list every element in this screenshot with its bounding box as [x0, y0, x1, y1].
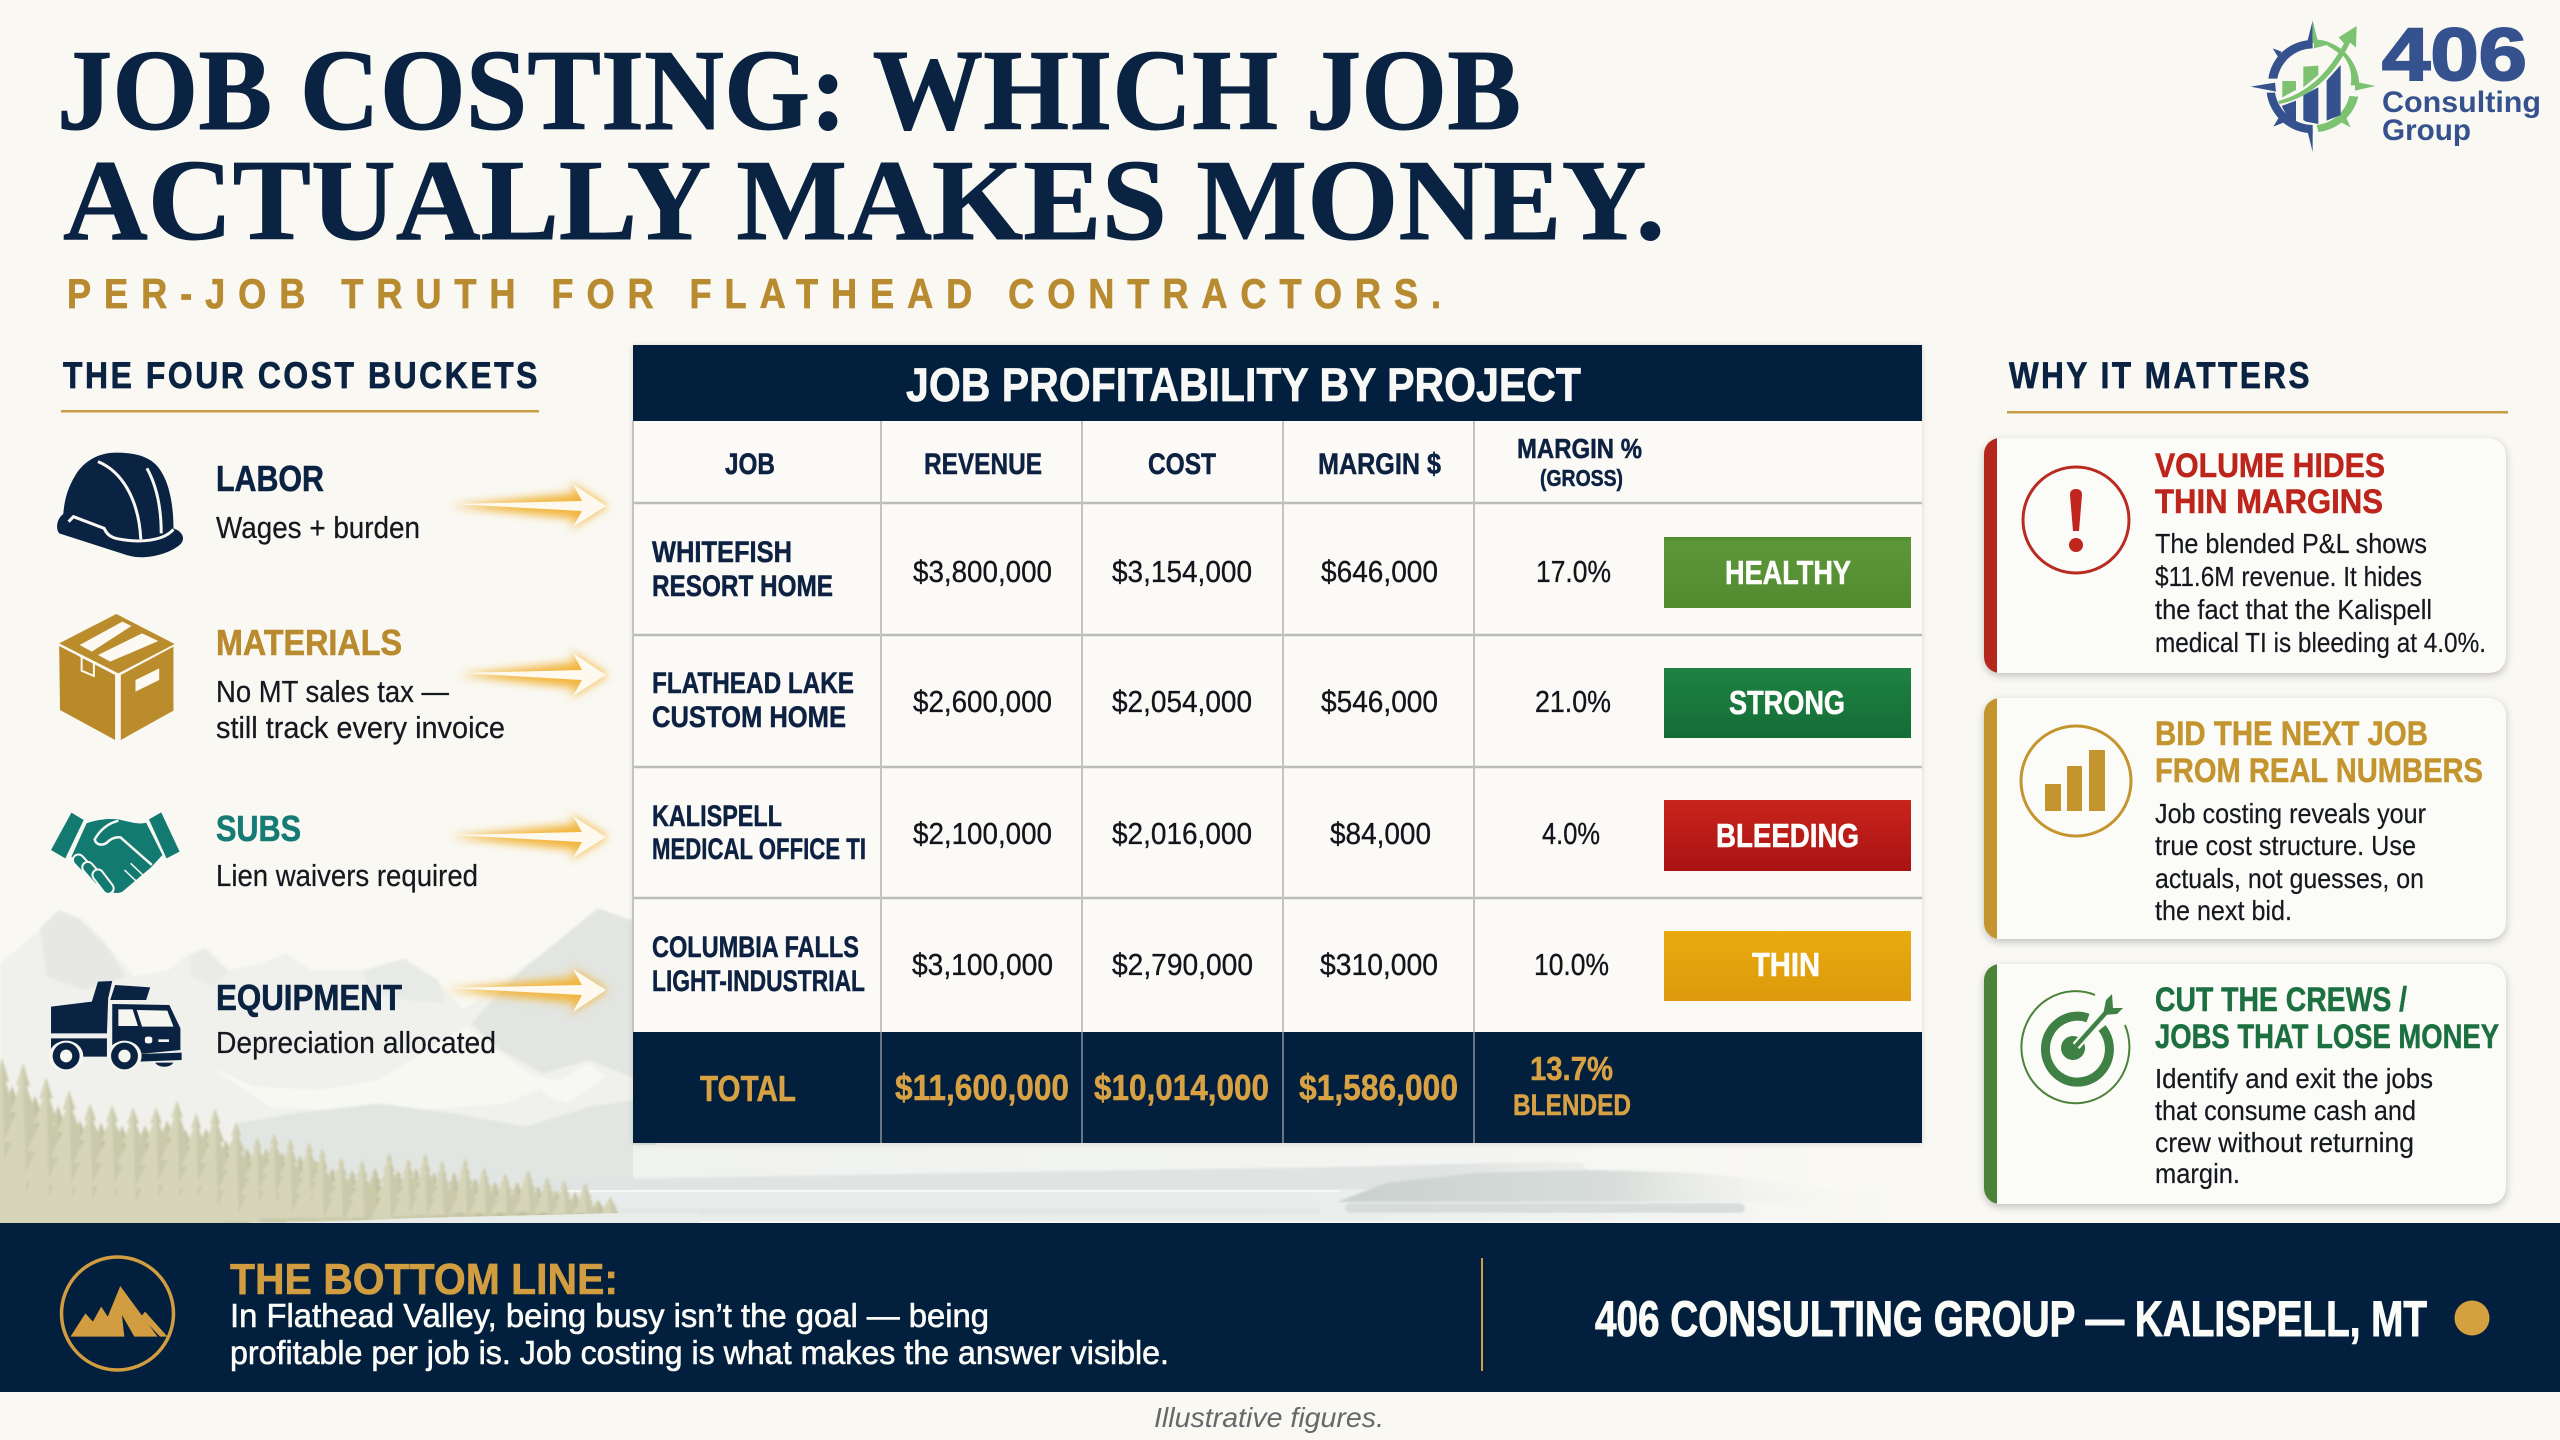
- logo: 406 Consulting Group: [2251, 13, 2541, 152]
- lake mist below table: [633, 1145, 1833, 1205]
- icon: dump truck: [49, 981, 182, 1071]
- panel: the four cost buckets: [49, 355, 608, 1071]
- bottom line text: In Flathead Valley, being busy isn’t the goal — being: [230, 1297, 989, 1334]
- row: columbia falls light-industrial: $310,000: [1320, 947, 1438, 982]
- row: columbia falls light-industrial: $3,100,000: [912, 947, 1053, 982]
- card title: [2155, 447, 2385, 521]
- card body: [2155, 528, 2486, 658]
- card title: THIN MARGINS: [2155, 483, 2383, 521]
- row: columbia falls light-industrial: $2,790,000: [1112, 947, 1253, 982]
- text: labor: Wages + burden: [216, 510, 420, 545]
- table title bar: [633, 345, 1922, 421]
- card title: [2155, 981, 2499, 1056]
- row: whitefish resort home: 17.0%: [1536, 554, 1611, 589]
- arrow: materials to table: [458, 651, 608, 698]
- row: columbia falls light-industrial: 10.0%: [1534, 947, 1609, 982]
- badge: healthy: [1664, 537, 1911, 608]
- text: subs: SUBS: [216, 808, 301, 849]
- column headers: REVENUE: [924, 448, 1042, 481]
- card body: [2155, 1063, 2433, 1189]
- card: bid the next job from real numbers: [1984, 698, 2506, 939]
- text: materials: still track every invoice: [216, 710, 505, 745]
- badge: bleeding: BLEEDING: [1716, 817, 1859, 854]
- bottom line banner: [0, 1223, 2560, 1392]
- row: whitefish resort home: RESORT HOME: [652, 570, 833, 603]
- logo wordmark: 406: [2382, 13, 2527, 96]
- row: flathead lake custom home: $2,600,000: [913, 684, 1052, 719]
- card body: [2155, 798, 2426, 926]
- text: materials: MATERIALS: [216, 622, 402, 663]
- card body: crew without returning: [2155, 1127, 2414, 1158]
- card title: BID THE NEXT JOB: [2155, 715, 2428, 753]
- row: whitefish resort home: WHITEFISH: [652, 536, 792, 569]
- card body: Identify and exit the jobs: [2155, 1063, 2433, 1094]
- icon: bar chart circle: [2021, 726, 2131, 836]
- text: subs: Lien waivers required: [216, 858, 478, 893]
- arrow: equipment to table: [446, 967, 608, 1014]
- row: whitefish resort home: $3,154,000: [1112, 554, 1252, 589]
- text: equipment: [216, 977, 496, 1060]
- row: whitefish resort home: $646,000: [1321, 554, 1438, 589]
- text: subs: [216, 808, 478, 893]
- badge: bleeding: [1664, 800, 1911, 871]
- card title: CUT THE CREWS /: [2155, 981, 2407, 1019]
- row: columbia falls light-industrial: [652, 931, 1911, 1001]
- icon: mountain emblem: [62, 1257, 174, 1370]
- title: JOB COSTING: WHICH JOB: [57, 27, 1521, 155]
- card body: actuals, not guesses, on: [2155, 863, 2424, 894]
- table title bar: JOB PROFITABILITY BY PROJECT: [906, 358, 1581, 411]
- logo wordmark: Consulting: [2382, 86, 2541, 119]
- row: total: $10,014,000: [1094, 1067, 1269, 1108]
- row: whitefish resort home: $3,800,000: [913, 554, 1052, 589]
- text: materials: No MT sales tax —: [216, 674, 449, 709]
- icon: alert circle: [2023, 467, 2129, 573]
- logo wordmark: Group: [2382, 114, 2471, 147]
- badge: thin: [1664, 931, 1911, 1001]
- text: labor: LABOR: [216, 458, 324, 499]
- row: flathead lake custom home: 21.0%: [1535, 684, 1611, 719]
- column headers: MARGIN %: [1517, 433, 1642, 464]
- column headers: MARGIN $: [1318, 448, 1441, 481]
- panel: job profitability table: [633, 345, 1922, 1143]
- row: kalispell medical office ti: [652, 800, 1911, 871]
- row: flathead lake custom home: $2,054,000: [1112, 684, 1252, 719]
- card title: [2155, 715, 2483, 790]
- row: whitefish resort home: [652, 536, 1911, 608]
- row: kalispell medical office ti: MEDICAL OFFICE TI: [652, 833, 866, 866]
- row: flathead lake custom home: [652, 667, 1911, 738]
- logo wordmark: [2382, 13, 2541, 147]
- card: cut the crews / jobs that lose money: [1984, 964, 2506, 1204]
- badge: strong: [1664, 668, 1911, 738]
- card body: the fact that the Kalispell: [2155, 594, 2432, 625]
- bottom line text: [230, 1255, 1169, 1371]
- card body: The blended P&L shows: [2155, 528, 2427, 559]
- card body: $11.6M revenue. It hides: [2155, 561, 2422, 592]
- heading: why it matters: WHY IT MATTERS: [2009, 355, 2312, 396]
- row: total: 13.7%: [1530, 1050, 1613, 1087]
- icon: hard hat: [57, 453, 183, 557]
- card title: FROM REAL NUMBERS: [2155, 752, 2483, 790]
- subtitle: PER-JOB TRUTH FOR FLATHEAD CONTRACTORS.: [67, 270, 1454, 317]
- badge: healthy: HEALTHY: [1725, 554, 1851, 591]
- gold dot: [2454, 1300, 2490, 1336]
- row: flathead lake custom home: CUSTOM HOME: [652, 701, 846, 734]
- card body: that consume cash and: [2155, 1095, 2416, 1126]
- row: kalispell medical office ti: $2,100,000: [913, 816, 1052, 851]
- text: equipment: EQUIPMENT: [216, 977, 402, 1018]
- text: equipment: Depreciation allocated: [216, 1025, 496, 1060]
- card body: medical TI is bleeding at 4.0%.: [2155, 627, 2486, 658]
- arrow: subs to table: [450, 814, 608, 860]
- column headers: COST: [1148, 448, 1216, 481]
- row: total: $11,600,000: [895, 1067, 1069, 1108]
- row: kalispell medical office ti: $2,016,000: [1112, 816, 1252, 851]
- icon: compass with rising chart: [2251, 21, 2376, 152]
- forest of conifers: [0, 1058, 621, 1240]
- column headers: (GROSS): [1540, 465, 1623, 491]
- title: [57, 27, 1665, 265]
- card body: the next bid.: [2155, 895, 2292, 926]
- row: total: $1,586,000: [1299, 1067, 1458, 1108]
- row: columbia falls light-industrial: LIGHT-INDUSTRIAL: [652, 965, 865, 998]
- row: total: TOTAL: [700, 1068, 796, 1109]
- row: total: [633, 1032, 1922, 1143]
- row: flathead lake custom home: FLATHEAD LAKE: [652, 667, 854, 700]
- icon: cardboard box: [59, 614, 175, 740]
- row: kalispell medical office ti: KALISPELL: [652, 800, 782, 833]
- row: flathead lake custom home: $546,000: [1321, 684, 1438, 719]
- row: kalispell medical office ti: 4.0%: [1542, 816, 1600, 851]
- footnote: Illustrative figures.: [1154, 1402, 1384, 1433]
- bottom line text: profitable per job is. Job costing is what makes the answer visible.: [230, 1334, 1169, 1371]
- badge: strong: STRONG: [1729, 684, 1845, 721]
- bottom line text: THE BOTTOM LINE:: [230, 1255, 618, 1304]
- panel: why it matters: [1984, 355, 2508, 1204]
- text: materials: [216, 622, 505, 745]
- row: columbia falls light-industrial: COLUMBIA FALLS: [652, 931, 859, 964]
- card body: true cost structure. Use: [2155, 830, 2416, 861]
- column headers: [725, 433, 1642, 491]
- row: total: BLENDED: [1513, 1089, 1631, 1122]
- badge: thin: THIN: [1752, 946, 1820, 983]
- title: ACTUALLY MAKES MONEY.: [63, 137, 1665, 265]
- icon: target with arrow: [2021, 991, 2129, 1103]
- card: volume hides thin margins: [1984, 438, 2506, 673]
- column headers: JOB: [725, 448, 775, 481]
- card body: Job costing reveals your: [2155, 798, 2426, 829]
- icon: handshake: [51, 812, 180, 893]
- card title: VOLUME HIDES: [2155, 447, 2385, 485]
- row: kalispell medical office ti: $84,000: [1330, 816, 1431, 851]
- heading: the four cost buckets: THE FOUR COST BUCKETS: [63, 355, 540, 396]
- arrow: labor to table: [450, 482, 608, 529]
- card body: margin.: [2155, 1158, 2240, 1189]
- text: labor: [216, 458, 420, 545]
